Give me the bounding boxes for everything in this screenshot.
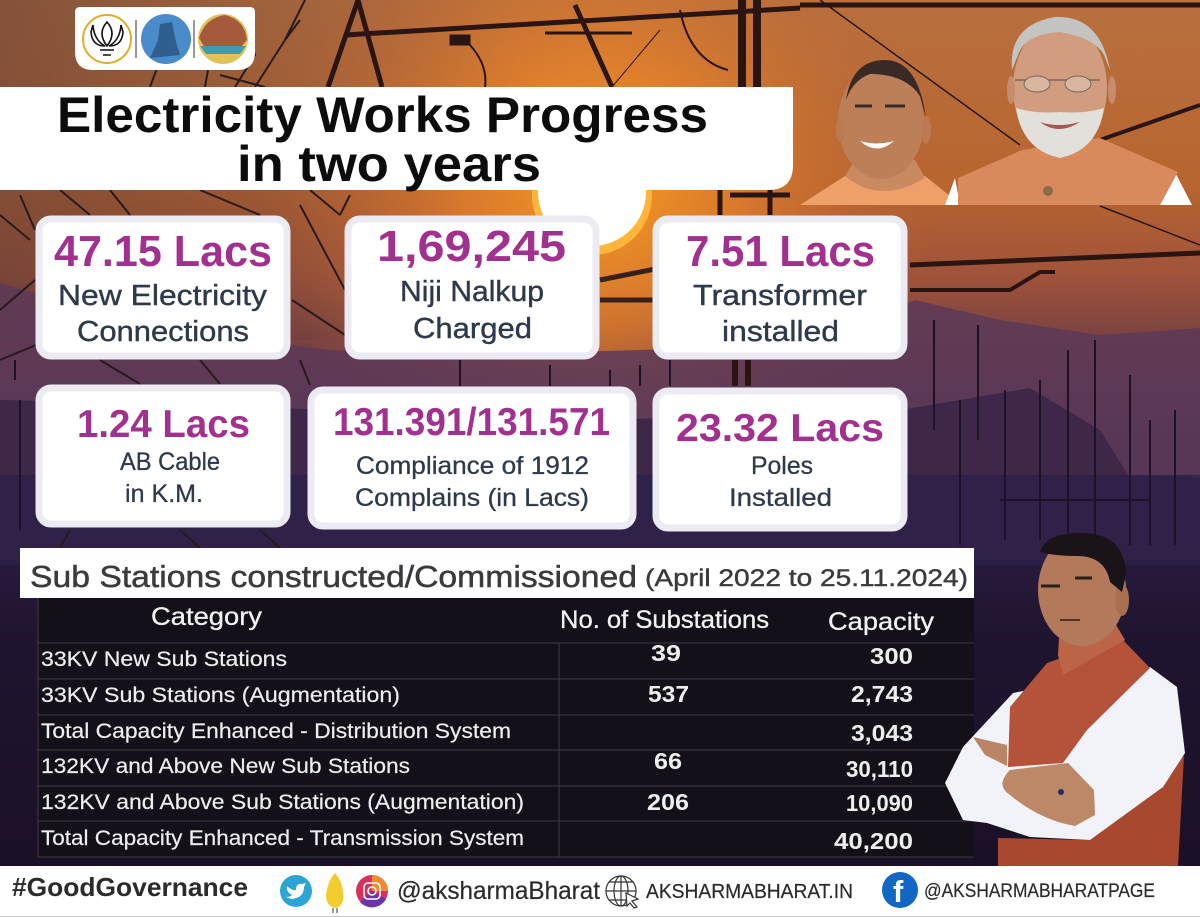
icon: instagram — [356, 875, 388, 907]
hashtag: #GoodGovernance — [12, 872, 248, 902]
stat card: new connections: Connections — [77, 316, 249, 348]
title panel — [0, 87, 793, 192]
stat card: compliance: Compliance of 1912 — [356, 452, 589, 480]
table column headers: Category — [151, 603, 263, 631]
table row: distribution total: 3,043 — [851, 720, 913, 746]
stat card: poles: Installed — [729, 484, 832, 512]
stat card: transformer: Transformer — [693, 280, 867, 312]
icon: facebook — [882, 872, 918, 909]
table row: 33KV new — [41, 640, 913, 671]
stat card: compliance: Complains (in Lacs) — [355, 484, 589, 512]
table column headers: No. of Substations — [560, 606, 769, 634]
table row: 132KV new: 66 — [654, 748, 682, 774]
logo panel — [75, 7, 255, 70]
portrait: Modi — [945, 17, 1192, 205]
table heading: Sub Stations constructed/Commissioned — [30, 559, 637, 594]
table row: 33KV augmentation: 2,743 — [851, 681, 913, 707]
stat card: compliance: 131.391/131.571 — [333, 401, 610, 444]
table column headers: Capacity — [828, 608, 935, 636]
stat card: AB cable: 1.24 Lacs — [77, 403, 250, 446]
table panel: sub stations — [20, 548, 974, 857]
table row: 132KV augmentation: 132KV and Above Sub Stations (Augmentation) — [41, 791, 524, 814]
stat card: new connections — [39, 219, 287, 356]
mountains — [0, 283, 1200, 560]
icon: globe — [606, 876, 638, 908]
table row: 33KV augmentation: 33KV Sub Stations (Augmentation) — [41, 684, 400, 707]
table row: 33KV augmentation — [41, 681, 913, 707]
title: Electricity Works Progress — [57, 87, 708, 143]
stat card: transformer: 7.51 Lacs — [686, 227, 875, 276]
reeds — [15, 320, 1175, 545]
table heading: (April 2022 to 25.11.2024) — [645, 565, 968, 592]
branches — [0, 0, 790, 548]
table row: 132KV augmentation: 206 — [647, 789, 689, 815]
table row: 33KV new: 300 — [870, 643, 913, 669]
table row: transmission total: 40,200 — [834, 828, 913, 854]
table row: transmission total — [41, 827, 913, 854]
icon: blue emblem — [141, 14, 191, 64]
handle: aksharmaBharat: @aksharmaBharat — [397, 877, 600, 905]
table row: 33KV new: 33KV New Sub Stations — [41, 648, 287, 671]
stat card: niji nalkup: Niji Nalkup — [400, 276, 544, 308]
icon: koo bird — [326, 873, 343, 913]
stat card: AB cable: AB Cable — [120, 448, 220, 476]
table row: distribution total — [41, 720, 913, 746]
table row: 132KV augmentation: 10,090 — [846, 790, 913, 816]
title — [57, 87, 708, 192]
stat card: niji nalkup: 1,69,245 — [377, 222, 566, 271]
stat card: AB cable — [39, 388, 287, 524]
stat card: transformer — [656, 219, 904, 356]
table row: distribution total: Total Capacity Enhanced - Distribution System — [41, 720, 511, 743]
stat card: AB cable: in K.M. — [125, 480, 203, 508]
title: in two years — [237, 136, 541, 192]
table row: 132KV new — [41, 748, 913, 782]
table row: transmission total: Total Capacity Enhanced - Transmission System — [41, 827, 524, 850]
icon: twitter — [280, 875, 312, 907]
stat card: new connections: 47.15 Lacs — [54, 227, 272, 276]
icon: mahakumbh emblem — [198, 14, 248, 64]
stat card: niji nalkup: Charged — [413, 313, 532, 345]
table row: 33KV augmentation: 537 — [648, 681, 689, 707]
pylons and wires — [270, 0, 1200, 290]
portrait: Yogi — [800, 60, 950, 205]
stat card: compliance — [311, 390, 633, 526]
website: AKSHARMABHARAT.IN — [646, 881, 853, 903]
stat card: poles: Poles — [751, 452, 813, 480]
stat card: poles: 23.32 Lacs — [676, 407, 884, 450]
stat card: niji nalkup — [348, 219, 596, 356]
portrait: minister with folded arms — [945, 533, 1185, 866]
table row: 132KV new: 132KV and Above New Sub Stations — [41, 755, 410, 778]
table row: 33KV new: 39 — [651, 640, 681, 666]
stat card: transformer: installed — [722, 316, 839, 348]
table heading — [20, 548, 974, 598]
facebook handle: @AKSHARMABHARATPAGE — [924, 881, 1155, 902]
stat card: poles — [656, 391, 904, 528]
icon: facebook: f — [893, 874, 904, 909]
table column headers — [151, 603, 935, 636]
stat card: new connections: New Electricity — [58, 280, 268, 312]
footer bar — [0, 866, 1200, 917]
table row: 132KV augmentation — [41, 789, 913, 816]
icon: lotus logo — [83, 15, 131, 63]
table row: 132KV new: 30,110 — [846, 756, 913, 782]
